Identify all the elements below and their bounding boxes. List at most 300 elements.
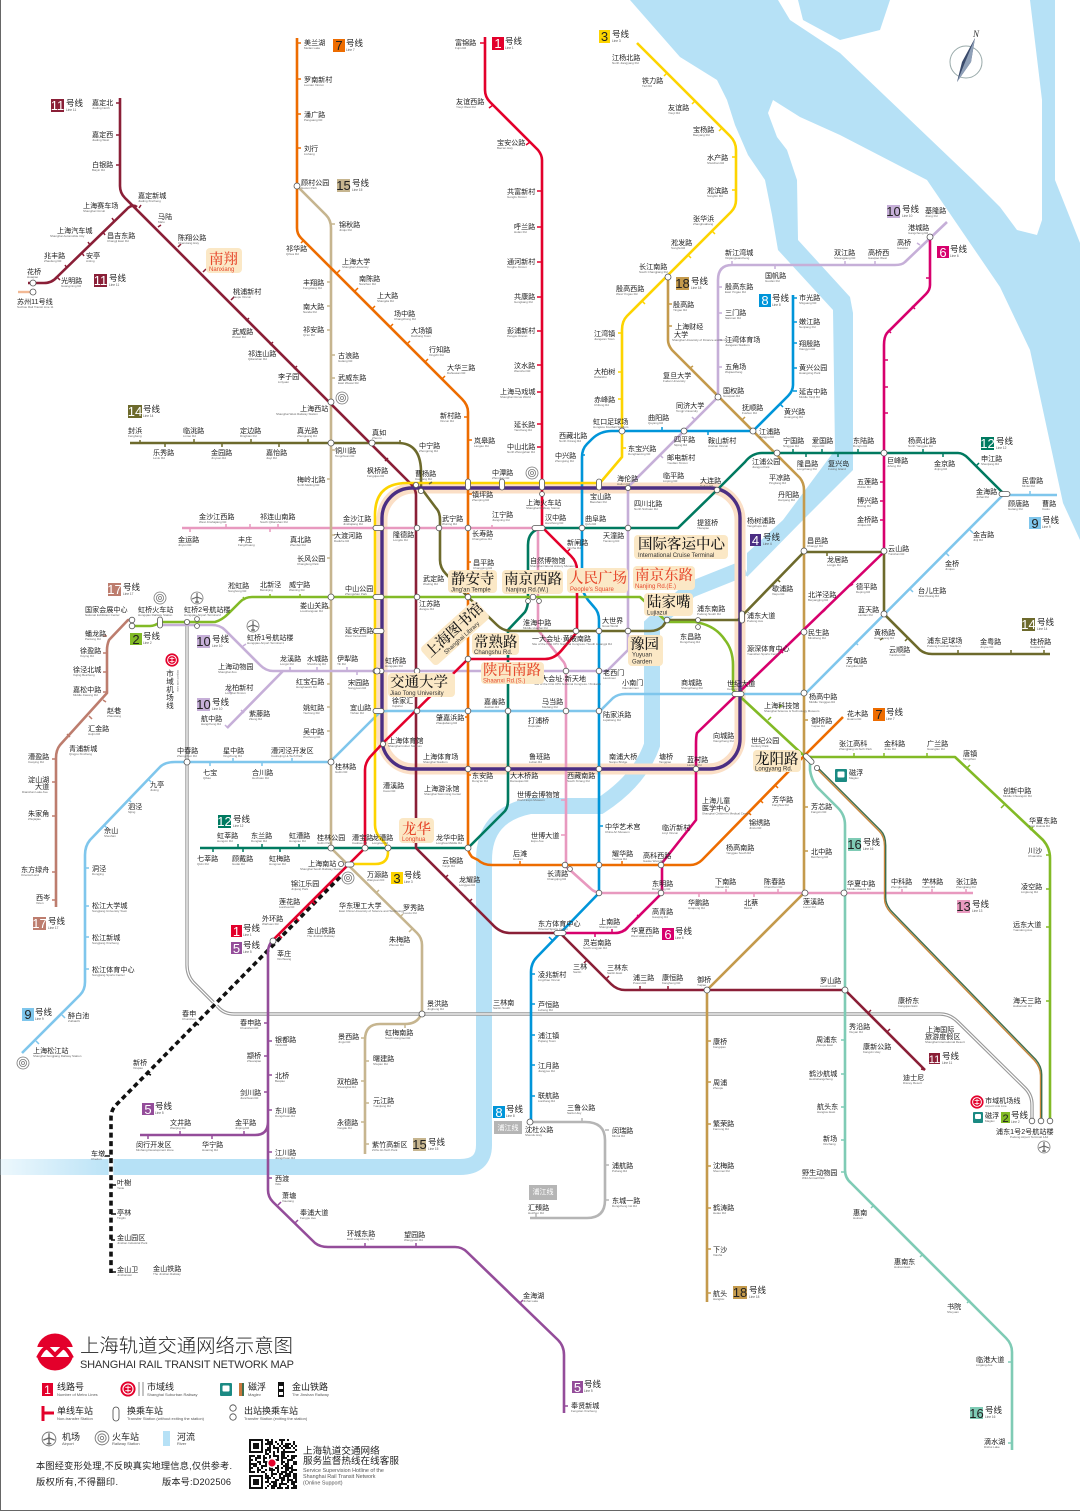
station labels: line 11: Jiading North: [92, 106, 110, 110]
station labels: line 5: Jianchuan Rd: [240, 1096, 259, 1100]
station labels: line 3 and ring: 世博大道: [531, 832, 559, 840]
disclaimer note: 版本号:D202506: [162, 1476, 231, 1487]
station labels: lines 12, 13, 14, 6 and 18: Tinglin: [117, 1216, 126, 1220]
line 5: [140, 940, 564, 1413]
legend: line number: 1: [44, 1383, 51, 1397]
station labels: line 11: Xiuyan Rd: [849, 1030, 863, 1034]
station labels: line 5: Beiqiao: [275, 1079, 285, 1083]
station labels: line 3 and ring: Tangqiao: [659, 760, 672, 764]
badge line 17 south: 号线: [48, 916, 66, 926]
station labels: lines 12, 13, 14, 6 and 18: 金山铁路: [153, 1265, 181, 1273]
station labels: lines 12, 13, 14, 6 and 18: Middle Huaxia Rd: [847, 887, 871, 891]
legend: airport: [42, 1431, 80, 1446]
station labels: line 7: [286, 38, 868, 881]
station labels: line 7: Fanghua Rd: [772, 803, 789, 807]
station labels: line 5: Xiaotang: [282, 1199, 294, 1203]
badge line 2 east: 号线: [1011, 1110, 1029, 1120]
station labels: line 1: 延长路: [514, 421, 535, 429]
station labels: line 2: [85, 580, 1057, 1139]
card: Longhua: 龙华: [402, 820, 431, 838]
station labels: lines 12, 13, 14, 6 and 18: 临港大道: [976, 1356, 1004, 1364]
station labels: line 11: Longyao Rd: [459, 883, 476, 887]
station labels: lines 17 and 9: Xingzhong Rd: [223, 754, 242, 758]
station labels: lines 12, 13, 14, 6 and 18: Huinan East: [894, 1265, 911, 1269]
station labels: lines 8 and 10: 鞍山新村: [708, 437, 736, 445]
legend: non-transfer station: [43, 1405, 93, 1421]
station labels: lines 8 and 10: 黄兴公园: [799, 364, 827, 372]
station labels: line 3 and ring: 西藏南路: [567, 772, 595, 780]
station labels: line 3 and ring: 水产路: [707, 154, 728, 162]
station labels: lines 12, 13, 14, 6 and 18: 中宁路: [419, 442, 440, 450]
station labels: line 11: 秀沿路: [849, 1023, 870, 1031]
station labels: line 2: Shanghai Science & Technology Museum: [764, 709, 820, 713]
station labels: lines 8 and 10: 嫩江路: [799, 318, 820, 326]
hotline text: Shanghai Rail Transit Network: [303, 1474, 376, 1480]
station labels: lines 12, 13, 14, 6 and 18: Zhangjiang Rd: [956, 885, 976, 889]
legend: Jinshan railway: 金山铁路: [292, 1381, 328, 1392]
station labels: lines 12, 13, 14, 6 and 18: Wild Animal Park: [802, 1176, 825, 1180]
station labels: line 7: Changqing Rd: [547, 877, 567, 881]
card: Jiao Tong University: [388, 673, 455, 697]
station labels: line 2: 创新中路: [1003, 787, 1031, 795]
station labels: lines 12, 13, 14, 6 and 18: Deping Rd: [856, 590, 871, 594]
station labels: lines 12, 13, 14, 6 and 18: 上南路: [599, 918, 620, 926]
badge line 8 south: 8: [495, 1105, 503, 1120]
station labels: lines 8 and 10: Xinjiangwancheng: [725, 256, 750, 260]
station labels: line 15: Gulang Rd: [338, 359, 353, 363]
station labels: line 3 and ring: 江宁路: [492, 511, 513, 519]
station labels: lines 12, 13, 14, 6 and 18: Shenmei Rd: [713, 1169, 730, 1173]
station labels: lines 12, 13, 14, 6 and 18: Huangyang Rd: [874, 636, 894, 640]
station labels: line 2: 金科路: [884, 740, 905, 748]
station labels: lines 8 and 10: Shanghai Zoo: [218, 670, 237, 674]
card: Jiao Tong University: Jiao Tong University: [390, 691, 444, 697]
station labels: lines 8 and 10: East Yingao Rd: [725, 290, 746, 294]
station labels: line 2: Zhongshan Park: [345, 592, 368, 596]
station labels: lines 17 and 9: 松江新城: [92, 934, 120, 942]
station labels: line 11: [17, 98, 924, 1085]
station labels: line 7: 芳华路: [772, 796, 793, 804]
station labels: line 7: Huamu Rd: [847, 717, 862, 721]
station labels: line 11: Changji East Rd: [107, 239, 129, 243]
station labels: lines 8 and 10: Ziteng Rd: [249, 717, 262, 721]
station labels: lines 17 and 9: Xuying Rd: [80, 654, 94, 658]
badge line 1 south: Line 1: [243, 933, 252, 937]
station labels: line 3 and ring: Expo Ave: [531, 839, 544, 843]
card: Shaanxi Rd S: [481, 661, 544, 684]
station labels: line 1: Shanghai Railway Station: [526, 506, 561, 510]
station labels: line 3 and ring: 医学中心: [702, 804, 730, 812]
station labels: line 5: 西渡: [275, 1175, 289, 1183]
badge line 13: Line 13: [972, 909, 983, 913]
station labels: lines 8 and 10: Jiangpu Rd: [759, 435, 775, 439]
station labels: line 11: 嘉定新城: [138, 192, 166, 200]
station labels: line 2: Middle Chuangxin Rd: [1003, 794, 1032, 798]
badge line 18 south: 18: [733, 1285, 747, 1300]
station labels: line 2: Chuansha: [1028, 854, 1042, 858]
station labels: line 3 and ring: 友谊路: [668, 104, 689, 112]
station labels: line 11: Baiyin Rd: [92, 168, 105, 172]
card: Changshu Rd: [472, 633, 519, 656]
Pujiang line name tags: [494, 1121, 557, 1200]
station labels: lines 12, 13, 14, 6 and 18: Dingbian Rd: [240, 434, 257, 438]
station labels: lines 12, 13, 14, 6 and 18: 御桥: [697, 976, 711, 984]
badge line 15: [336, 178, 370, 193]
station labels: line 3 and ring: 隆德路: [393, 531, 414, 539]
card: Lujiazui: [644, 593, 693, 616]
station labels: line 2: Hongqiao Railway Station: [138, 613, 173, 617]
station labels: line 2: 浦东1号2号航站楼: [996, 1128, 1054, 1136]
station labels: lines 17 and 9: 金吉路: [973, 531, 994, 539]
badge line 3: Line 3: [612, 39, 621, 43]
station labels: lines 12, 13, 14, 6 and 18: Zhenguang Rd: [297, 434, 317, 438]
station labels: line 3 and ring: 赤峰路: [594, 396, 615, 404]
station labels: lines 8 and 10: Oriental Sports Center: [538, 927, 568, 931]
station labels: lines 12, 13, 14, 6 and 18: Guiqiao Rd: [1030, 645, 1045, 649]
line 12: [200, 453, 1004, 848]
station labels: line 5: Wenjing Rd: [170, 1126, 186, 1130]
station labels: line 2: 虹桥2号航站楼: [184, 606, 231, 614]
station labels: line 7: Dong'an Rd: [472, 779, 488, 783]
badge line 5 north: [231, 940, 261, 956]
station labels: line 3 and ring: Dongbaoxing Rd: [628, 452, 651, 456]
station labels: lines 12, 13, 14, 6 and 18: Hongxin Rd: [217, 839, 233, 843]
Suzhou line 11 stub: [18, 291, 33, 293]
station labels: lines 12, 13, 14, 6 and 18: Gaoqing Rd: [652, 915, 668, 919]
station labels: lines 8 and 10: Wujiaochang: [725, 370, 743, 374]
station labels: lines 8 and 10: Jiangwan Stadium: [725, 343, 750, 347]
station labels: lines 17 and 9: Middle Jiasong Rd: [73, 693, 98, 697]
station labels: line 5: 银都路: [275, 1036, 296, 1044]
station labels: line 5: 东川路: [275, 1107, 296, 1115]
badge line 14 east: 14: [1021, 617, 1036, 632]
station labels: line 3 and ring: 虹桥路: [385, 657, 406, 665]
badge line 8: Line 8: [772, 303, 781, 307]
station labels: lines 17 and 9: Oriental Land: [21, 873, 39, 877]
station labels: lines 17 and 9: Sheshan: [104, 834, 116, 838]
station labels: lines 12, 13, 14, 6 and 18: 祁连山南路: [260, 513, 295, 521]
card: Longyang Rd: Longyang Rd.: [755, 766, 793, 772]
station labels: lines 12, 13, 14, 6 and 18: Fengzhuang: [238, 543, 255, 547]
station labels: lines 17 and 9: 曹路: [1042, 500, 1056, 508]
legend: Jinshan railway: The Jinshan Railway: [292, 1392, 329, 1397]
station labels: line 7: 大华三路: [447, 364, 475, 372]
badge line 18: [675, 276, 709, 291]
station labels: line 3 and ring: 陆家浜路: [603, 711, 631, 719]
station labels: lines 17 and 9: Middle Yanggao Rd: [809, 700, 835, 704]
station labels: lines 12, 13, 14, 6 and 18: Ningguo Rd: [783, 444, 799, 448]
station labels: lines 17 and 9: 淀山湖: [28, 776, 49, 784]
badge line 18: 号线: [691, 276, 709, 286]
station labels: line 3 and ring: 向城路: [713, 732, 734, 740]
badge line 3 south: 号线: [404, 870, 422, 880]
station labels: lines 17 and 9: Minlei Rd: [1022, 484, 1035, 488]
badge line 9 east: Line 9: [1042, 525, 1051, 529]
badge line 3 south: 3: [393, 871, 401, 886]
station labels: lines 17 and 9: 青浦新城: [69, 745, 97, 753]
station labels: line 1: 徐家汇: [392, 697, 413, 705]
station labels: line 3 and ring: 宝山路: [590, 493, 611, 501]
badge line 10 branch A: 10: [196, 634, 211, 649]
station labels: lines 17 and 9: Jinqiao: [945, 567, 955, 571]
station labels: line 11: 罗山路: [820, 977, 841, 985]
station labels: lines 12, 13, 14, 6 and 18: 定边路: [240, 427, 261, 435]
badge line 11 east: 11: [929, 1054, 940, 1066]
station labels: line 11: Fengqiao Rd: [367, 474, 385, 478]
station labels: line 1: Lianhua Rd: [279, 905, 295, 909]
station labels: line 2: Century Park: [751, 744, 769, 748]
station labels: line 3 and ring: 天潼路: [603, 532, 624, 540]
station labels: line 7: 祁华路: [286, 245, 307, 253]
station labels: lines 17 and 9: 大道: [35, 782, 49, 791]
station labels: line 5: Dongchuan Rd: [275, 1114, 295, 1118]
station labels: lines 17 and 9: Zhaoxiang: [107, 714, 121, 718]
station labels: line 3 and ring: 蓝村路: [687, 756, 708, 764]
station labels: lines 8 and 10: 江湾体育场: [725, 336, 760, 344]
station labels: lines 12, 13, 14, 6 and 18: 封浜: [128, 427, 142, 435]
badge line 11 west: Line 11: [109, 283, 119, 287]
station labels: lines 8 and 10: Lingzhao Xincun: [538, 978, 561, 982]
station labels: line 7: Shanghai University: [342, 265, 369, 269]
station labels: line 2: National Exhibition Center: [85, 613, 120, 617]
station labels: line 2: 张江高科: [839, 740, 867, 748]
station labels: lines 12, 13, 14, 6 and 18: 金沙江西路: [199, 513, 234, 521]
station labels: line 7: 肇嘉浜路: [436, 714, 464, 722]
station labels: line 7: Yaohua Rd: [612, 857, 627, 861]
station labels: lines 12, 13, 14, 6 and 18: Zhoupu East: [816, 1043, 833, 1047]
station labels: line 2: 世纪大道: [727, 680, 755, 688]
compass: N: [972, 29, 980, 39]
station labels: lines 17 and 9: [21, 476, 1056, 1058]
vertical label: suburban airport line: 机: [166, 684, 174, 695]
badge line 5 north: 5: [233, 941, 240, 956]
station labels: lines 12, 13, 14, 6 and 18: Jiangpu Park: [752, 465, 770, 469]
station labels: line 11: Malu: [158, 220, 165, 224]
station labels: line 7: 上大路: [377, 292, 398, 300]
station labels: lines 12, 13, 14, 6 and 18: 北中路: [811, 848, 832, 856]
station labels: line 1: Pengpu Xincun: [507, 334, 528, 338]
station labels: lines 17 and 9: Dongjing: [92, 872, 104, 876]
station labels: lines 8 and 10: 龙溪路: [280, 655, 301, 663]
station labels: lines 12, 13, 14, 6 and 18: 车墩: [91, 1150, 105, 1158]
badge line 7: 7: [335, 38, 343, 53]
legend: line number: 线路号: [57, 1381, 84, 1392]
station labels: line 3 and ring: 铁力路: [642, 77, 663, 85]
station labels: lines 12, 13, 14, 6 and 18: 江浦公园: [752, 458, 780, 466]
station labels: lines 17 and 9: Xujing Beicheng: [73, 673, 95, 677]
station labels: lines 12, 13, 14, 6 and 18: Jinshanwei: [117, 1273, 132, 1277]
station labels: lines 17 and 9: Sijing: [128, 810, 136, 814]
station labels: line 3 and ring: 提篮桥: [697, 519, 718, 527]
card: Nanjing Rd W: Nanjing Rd.(W.): [506, 588, 548, 594]
station labels: line 11: 武威路: [232, 328, 253, 336]
station labels: line 11: Kangxin Hwy: [863, 1050, 881, 1054]
station labels: lines 17 and 9: Jiuting: [150, 788, 159, 792]
card: Shaanxi Rd S: Shaanxi Rd.(S.): [483, 678, 525, 684]
card: Yuyuan Garden: 豫园: [630, 636, 659, 653]
station labels: lines 12, 13, 14, 6 and 18: Beiyangjing Rd: [808, 598, 829, 602]
station labels: line 7: 杨高南路: [726, 844, 754, 852]
badge line 1: 号线: [505, 36, 523, 46]
station labels: lines 12, 13, 14, 6 and 18: 昌邑路: [807, 537, 828, 545]
station labels: line 11: Luoshan Rd: [820, 984, 837, 988]
badge line 2: 号线: [143, 631, 161, 641]
station labels: line 3 and ring: 大连路: [700, 477, 721, 485]
station labels: lines 17 and 9: 松江大学城: [92, 902, 127, 910]
station labels: lines 12, 13, 14, 6 and 18: Airport Link Line: [985, 1104, 1007, 1108]
station labels: line 7: Gaoke West Rd: [643, 859, 664, 863]
station labels: line 7: Gucun Park: [301, 186, 317, 190]
station labels: line 3 and ring: Xiangcheng Rd: [713, 739, 734, 743]
station labels: line 3 and ring: 东宝兴路: [628, 445, 656, 453]
station labels: line 3 and ring: Shuichan Rd: [707, 161, 725, 165]
station labels: lines 17 and 9: Zuibaichi: [68, 1019, 80, 1023]
station labels: line 2: Tangzhen: [963, 757, 976, 761]
station labels: lines 8 and 10: 江月路: [538, 1062, 559, 1070]
station labels: line 5: Chunshen Rd: [240, 1026, 259, 1030]
station labels: lines 12, 13, 14, 6 and 18: 龙居路: [827, 556, 848, 564]
station labels: line 3 and ring: 淞发路: [671, 239, 692, 247]
station labels: line 11: 枫桥路: [367, 467, 388, 475]
station labels: lines 8 and 10: 紫藤路: [249, 710, 270, 718]
station labels: line 11: 嘉定北: [92, 99, 113, 107]
station labels: lines 17 and 9: 漕河泾开发区: [271, 747, 314, 755]
legend: transfer station: Transfer Station (without exiting the station): [127, 1416, 205, 1421]
station labels: lines 17 and 9: Songjiang Xincheng: [92, 941, 119, 945]
station labels: lines 8 and 10: Quyang Rd: [648, 421, 664, 425]
station labels: line 5: 奉贤新城: [571, 1402, 599, 1410]
station labels: line 2: 国家会展中心: [85, 606, 128, 614]
badge line 14 east: Line 14: [1037, 627, 1048, 631]
badge line 6: 号线: [950, 244, 968, 254]
island: east shoal: [1055, 0, 1080, 243]
station labels: line 7: 昌平路: [473, 559, 494, 567]
station labels: line 7: Zhenping Rd: [472, 498, 490, 502]
card: Longhua: Longhua: [402, 837, 426, 843]
station labels: lines 8 and 10: Yili Rd: [337, 662, 346, 666]
station labels: lines 12, 13, 14, 6 and 18: Yingao Rd: [673, 308, 687, 312]
station labels: lines 8 and 10: 沈杜公路: [525, 1126, 553, 1134]
badge line 3: 号线: [612, 29, 630, 39]
station labels: lines 12, 13, 14, 6 and 18: 叶榭: [117, 1179, 131, 1187]
station labels: lines 17 and 9: Taierzhuang Rd: [918, 594, 939, 598]
station labels: line 11: 白银路: [92, 161, 113, 169]
station labels: line 3 and ring: Youdian Xincun: [667, 461, 688, 465]
station labels: line 2: Hongqiao Airport Terminal 2: [184, 613, 221, 617]
station labels: line 11: Sanlin East: [607, 971, 622, 975]
station labels: line 3 and ring: Chifeng Rd: [594, 403, 609, 407]
card: People's Square: [567, 568, 628, 593]
station labels: lines 12, 13, 14, 6 and 18: Aiguo Rd: [812, 444, 825, 448]
station labels: lines 12, 13, 14, 6 and 18: Lexiu Rd: [153, 456, 165, 460]
station labels: lines 8 and 10: 红宝石路: [296, 678, 324, 686]
badge line 7 east: Line 7: [886, 717, 895, 721]
station labels: lines 8 and 10: 高桥: [897, 239, 911, 247]
station labels: lines 12, 13, 14, 6 and 18: Beicai: [744, 906, 753, 910]
station labels: line 1: North Zhongshan Rd: [507, 450, 535, 454]
card: Shaanxi Rd S: 陕西南路: [483, 661, 541, 679]
legend: river: River: [177, 1441, 187, 1446]
station labels: line 11: 桃浦新村: [233, 288, 261, 296]
station labels: line 2: Pudong Airport Terminal 1&2: [1010, 1135, 1048, 1139]
vertical label: suburban airport line: [166, 668, 180, 711]
station labels: lines 12, 13, 14, 6 and 18: Lantian Rd: [858, 613, 873, 617]
station labels: lines 8 and 10: Shuicheng Rd: [307, 662, 326, 666]
card: Nanxiang: [206, 248, 242, 273]
station labels: lines 12, 13, 14, 6 and 18: 德平路: [856, 583, 877, 591]
station labels: line 11: 曹杨路: [415, 470, 436, 478]
legend: line number: Number of Metro Lines: [57, 1392, 98, 1397]
station labels: lines 12, 13, 14, 6 and 18: 磁浮: [849, 769, 863, 777]
station labels: line 7: Nanchen Rd: [359, 282, 376, 286]
station labels: line 7: 锦绣路: [749, 819, 770, 827]
station labels: line 15: 大渡河路: [334, 532, 362, 540]
station labels: lines 12, 13, 14, 6 and 18: 虹莘路: [217, 832, 238, 840]
badge line 9 east: 9: [1031, 516, 1039, 531]
station labels: lines 8 and 10: 港城路: [908, 224, 929, 232]
badge line 15: 号线: [352, 178, 370, 188]
station labels: line 3 and ring: 大木桥路: [510, 772, 538, 780]
Jinshan railway: [111, 877, 340, 1273]
badge line 5 branch: [142, 1101, 173, 1117]
badge line 2 east: [1001, 1110, 1029, 1125]
station labels: lines 8 and 10: 双江路: [834, 249, 855, 257]
badge line 14: 14: [128, 404, 142, 419]
river: Yangtze and upper Huangpu: [630, 0, 1080, 577]
station labels: lines 12, 13, 14, 6 and 18: 歇浦路: [772, 585, 793, 593]
station labels: lines 8 and 10: Shuangjiang Rd: [834, 256, 856, 260]
station labels: lines 8 and 10: Huangxing Park: [799, 371, 821, 375]
station labels: lines 12, 13, 14, 6 and 18: Shenjiang Rd: [981, 462, 999, 466]
station labels: line 2: Zhangjiang Hi-Tech Park: [839, 747, 872, 751]
badge line 6 south: 6: [664, 927, 672, 942]
station labels: line 3 and ring: 宜山路: [350, 704, 371, 712]
station labels: line 3 and ring: Pudong South Rd: [697, 612, 721, 616]
legend: non-transfer station: 单线车站: [57, 1405, 93, 1416]
station labels: lines 8 and 10: 江浦路: [759, 428, 780, 436]
station labels: lines 12, 13, 14, 6 and 18: Pudong Ave: [747, 619, 763, 623]
station labels: lines 12, 13, 14, 6 and 18: 东陆路: [853, 437, 874, 445]
station labels: line 3 and ring: 上海游泳馆: [424, 785, 459, 793]
card: Shanghai Library: Shanghai Library: [443, 621, 481, 656]
badge line 12 west: Line 12: [233, 824, 244, 828]
station labels: lines 8 and 10: Longbai Xincun: [225, 691, 246, 695]
station labels: line 11: 花桥: [27, 268, 41, 276]
station labels: line 11: Wuwei Rd: [232, 335, 246, 339]
station labels: line 11: 陈翔公路: [178, 234, 206, 242]
station labels: lines 12, 13, 14, 6 and 18: Lianxi Rd: [803, 905, 816, 909]
station labels: lines 8 and 10: 延吉中路: [799, 388, 827, 396]
station labels: lines 12, 13, 14, 6 and 18: Shuyuan: [947, 1310, 959, 1314]
station labels: lines 12, 13, 14, 6 and 18: 惠南东: [894, 1258, 915, 1266]
station labels: line 2: Weining Rd: [289, 588, 305, 592]
station labels: line 3 and ring: West Yan'an Rd: [345, 634, 367, 638]
station labels: line 15: 锦秋路: [339, 221, 360, 229]
station labels: lines 8 and 10: Sanmen Rd: [725, 316, 741, 320]
badge line 11: 11: [51, 98, 64, 113]
station labels: lines 17 and 9: Songjiang University Town: [92, 909, 127, 913]
station labels: lines 8 and 10: Luheng Rd: [538, 1008, 553, 1012]
badge line 2 east: 2: [1002, 1113, 1009, 1125]
station labels: line 7: Dahuasan Rd: [447, 371, 466, 375]
station labels: line 7: 岚皋路: [474, 437, 495, 445]
station labels: line 5: East Huancheng Rd: [347, 1237, 374, 1241]
station labels: line 7: 龙华中路: [436, 834, 464, 842]
badge line 7 east: 号线: [886, 707, 904, 717]
station labels: lines 8 and 10: 国帆路: [765, 272, 786, 280]
legend: suburban railway: 市域线: [147, 1381, 174, 1392]
station labels: line 11: Shanghai West Railway Station: [276, 412, 318, 416]
